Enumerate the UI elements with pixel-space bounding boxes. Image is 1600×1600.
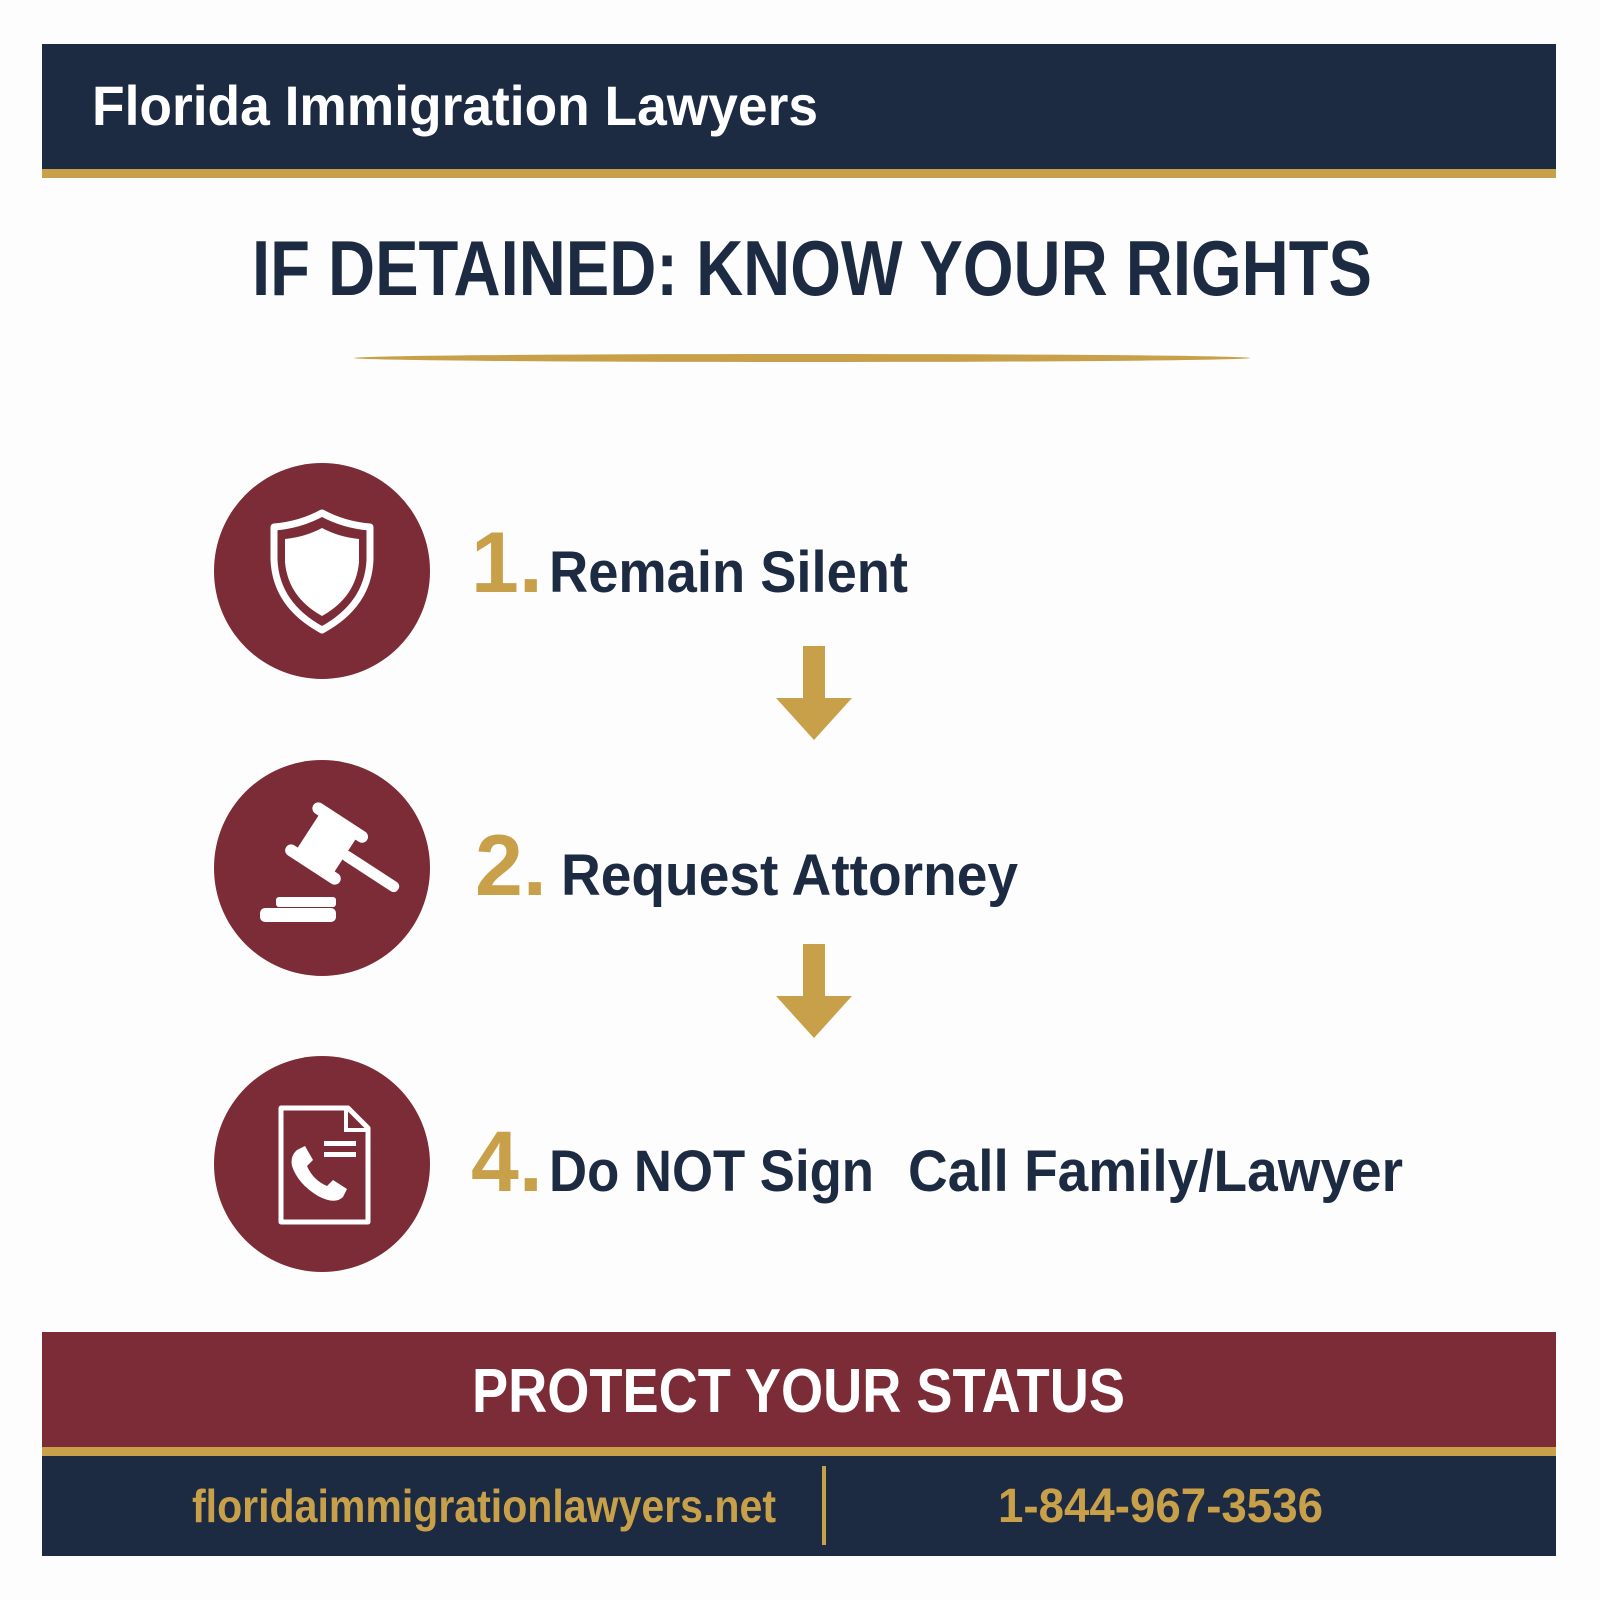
step 2 (214, 760, 1018, 976)
icon: gavel (214, 760, 430, 976)
contact bar (42, 1456, 1556, 1556)
phone: 1-844-967-3536 (998, 1480, 1323, 1533)
icon: shield (214, 463, 430, 679)
icon: document with phone (214, 1056, 430, 1272)
step 3 text: 4. (471, 1114, 543, 1210)
arrow 1 (776, 646, 852, 740)
arrow 2 (776, 944, 852, 1038)
header bar (42, 44, 1556, 178)
footer banner (42, 1332, 1556, 1456)
step 1: Remain Silent (549, 540, 908, 605)
step 2: Request Attorney (561, 843, 1018, 908)
header text: Florida Immigration Lawyers (92, 74, 818, 137)
step 1 text: 1. (471, 515, 543, 611)
website: floridaimmigrationlawyers.net (192, 1480, 776, 1532)
step 3: Do NOT Sign (549, 1139, 874, 1204)
step 3: Call Family/Lawyer (908, 1139, 1403, 1204)
footer heading: PROTECT YOUR STATUS (472, 1357, 1125, 1426)
step 1 (214, 463, 908, 679)
step 2 text: 2. (475, 818, 547, 914)
step 3 (214, 1056, 1403, 1272)
title: IF DETAINED: KNOW YOUR RIGHTS (252, 224, 1372, 312)
title underline (354, 354, 1250, 362)
